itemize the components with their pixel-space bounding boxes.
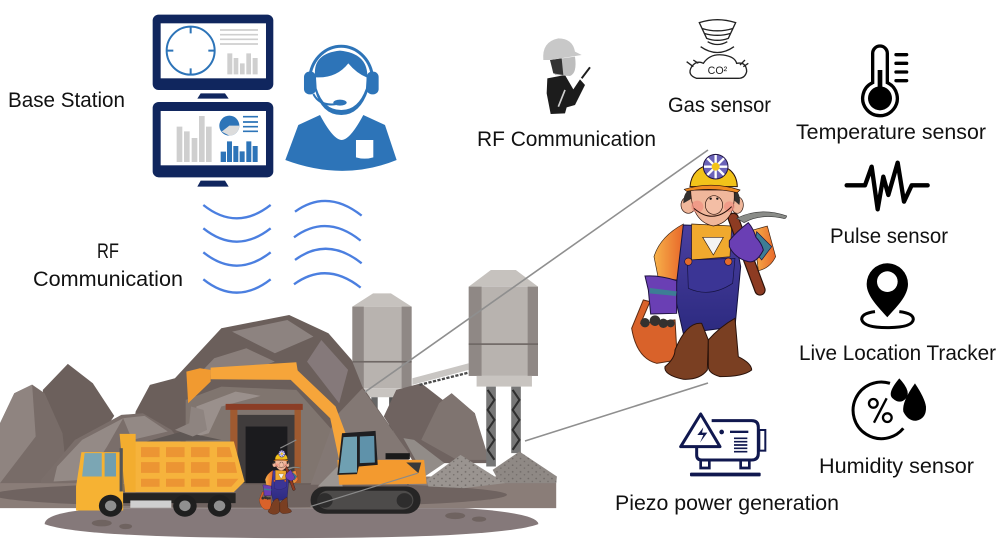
label: RF Communication left: Communication [33,268,183,291]
icon: pulse [847,163,928,209]
ground band [0,476,556,508]
icon: thermometer [863,46,907,116]
link lines inside scene [280,440,418,506]
label: Pulse sensor: Pulse sensor [830,225,948,248]
label: Temperature sensor: Temperature sensor [796,121,986,144]
excavator [186,362,427,514]
label: RF Communication left [33,240,183,291]
base station workstation [153,15,397,293]
mine entrance [226,404,303,483]
RF waves right [294,201,362,288]
large miner figure [632,154,787,379]
icon: humidity [853,378,926,439]
conveyor [412,363,469,385]
monitor top [153,15,273,99]
icon: worker with radio [543,38,590,114]
RF waves left [203,205,271,293]
lower ground [45,508,538,538]
icon: location pin [862,263,913,328]
label: Base Station: Base Station [8,89,125,112]
small miner [259,450,301,514]
right mountains [384,383,489,463]
label: Live Location Tracker: Live Location Tracker [799,342,996,365]
label: Humidity sensor: Humidity sensor [819,455,974,478]
big mountain [125,315,409,485]
icon: gas sensor [687,20,748,78]
label: Piezo power generation: Piezo power generation [615,492,839,515]
dust plume [175,407,207,437]
icon: gas sensor: CO² [708,65,728,77]
gravel piles [146,432,557,488]
operator [285,46,397,171]
front hill [41,413,193,483]
silo 2 [469,270,538,466]
left mountains [0,364,114,483]
label: RF Communication left: RF [97,240,119,263]
pointer lines to miner [365,150,708,441]
mining site scene [0,270,557,538]
silo 1 [352,293,412,431]
monitor bottom [153,102,273,187]
dump truck [76,434,245,517]
label: Gas sensor: Gas sensor [668,94,771,117]
label: RF Communication right: RF Communication [477,128,656,151]
icon: piezo generator [681,414,765,476]
